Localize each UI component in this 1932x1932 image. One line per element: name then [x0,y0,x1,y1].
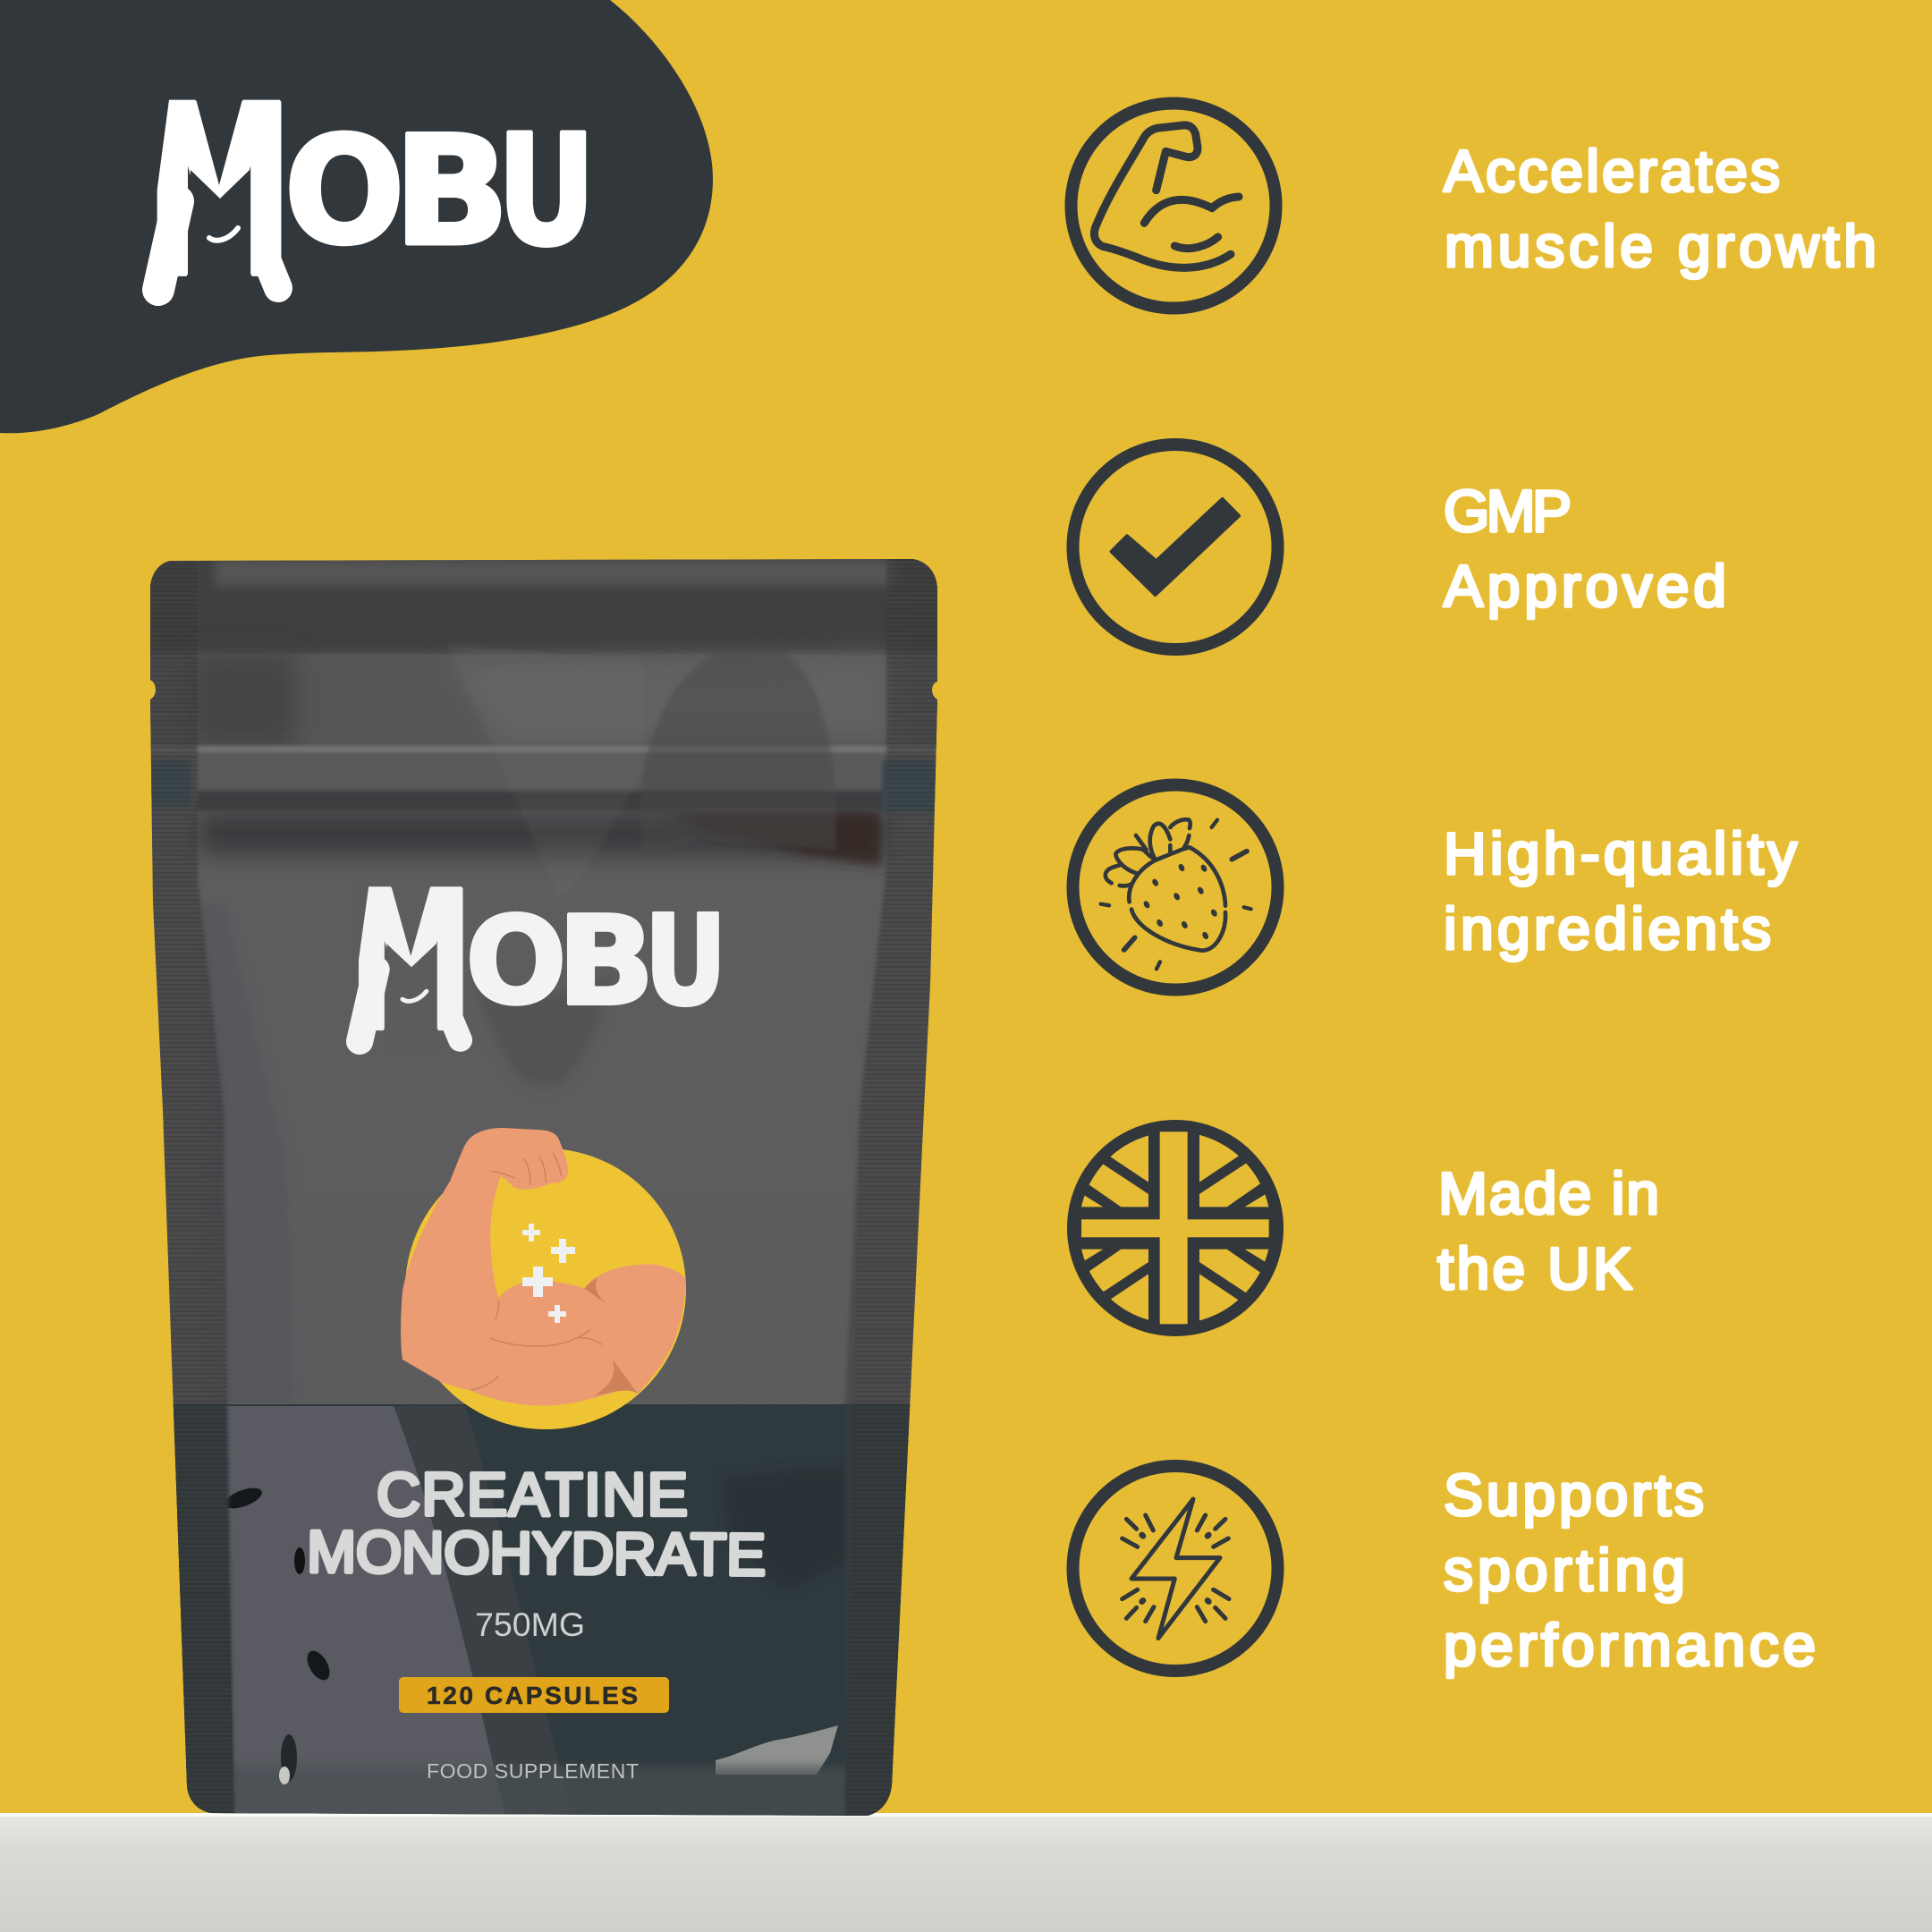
benefit 2: GMP approved [1073,445,1726,649]
panel: product pouch [143,537,948,1825]
product name: MONOHYDRATE [307,1518,766,1588]
arm [401,1128,686,1406]
dosage: 750MG [475,1606,585,1643]
pouch logo: MOBU [349,853,727,1073]
text: high-quality ingredients: High-quality [1444,820,1797,886]
text: accelerates muscle growth: muscle growth [1445,213,1877,279]
text: GMP approved: GMP [1444,478,1572,544]
food supplement note: FOOD SUPPLEMENT [427,1759,639,1783]
text: high-quality ingredients [1444,820,1797,962]
lower dark band [174,1404,911,1816]
text: GMP approved: Approved [1444,553,1726,619]
text: supports sporting performance: performance [1444,1612,1816,1678]
wordmark: MOBU: U [497,104,596,280]
ground shelf [0,1813,1932,1932]
benefit 1: muscle growth [1072,104,1877,308]
zip seal [143,746,948,810]
yellow disc [405,1148,686,1429]
pouch logo: MOBU: O [466,891,566,1031]
icon: union flag [1067,1120,1284,1336]
wordmark: MOBU [146,58,596,328]
text: supports sporting performance: Supports [1444,1462,1704,1528]
wordmark: MOBU: M [146,58,292,328]
pouch body [143,555,948,1825]
text: accelerates muscle growth: Accelerates [1444,138,1780,204]
product graphic: flexed arm on yellow disc [401,1128,686,1429]
icon: strawberry [1073,785,1277,989]
text: accelerates muscle growth [1444,138,1877,279]
text: supports sporting performance: sporting [1444,1537,1685,1603]
pouch logo: MOBU: U [644,888,727,1033]
text: high-quality ingredients: ingredients [1444,895,1771,962]
product name: CREATINE [377,1461,688,1529]
pouch logo: MOBU: B [557,890,655,1032]
wordmark: MOBU: B [394,104,510,279]
pouch logo: MOBU: M [349,853,472,1073]
text: made in the UK: Made in [1438,1160,1659,1226]
icon: lightning bolt [1073,1466,1277,1671]
text: supports sporting performance [1444,1462,1816,1678]
side seals [143,555,948,1825]
icon: check mark [1073,445,1277,649]
benefit 5: sporting performance [1073,1462,1816,1678]
text: made in the UK: the UK [1437,1235,1632,1301]
capsule count label [399,1677,669,1713]
benefit 3: high-quality ingredients [1073,785,1797,989]
product name [307,1461,766,1588]
text: made in the UK [1437,1160,1659,1301]
text: GMP approved [1444,478,1726,619]
capsule count label: 120 CAPSULES [427,1682,638,1709]
wordmark: MOBU: O [284,106,404,277]
ghost logo shapes [644,655,836,850]
benefit 4: made in the UK [1067,1120,1659,1336]
sparkle plus marks [522,1224,575,1323]
icon: flexed arm [1072,104,1275,308]
logo panel: dark blob with MOBU wordmark [0,0,713,433]
